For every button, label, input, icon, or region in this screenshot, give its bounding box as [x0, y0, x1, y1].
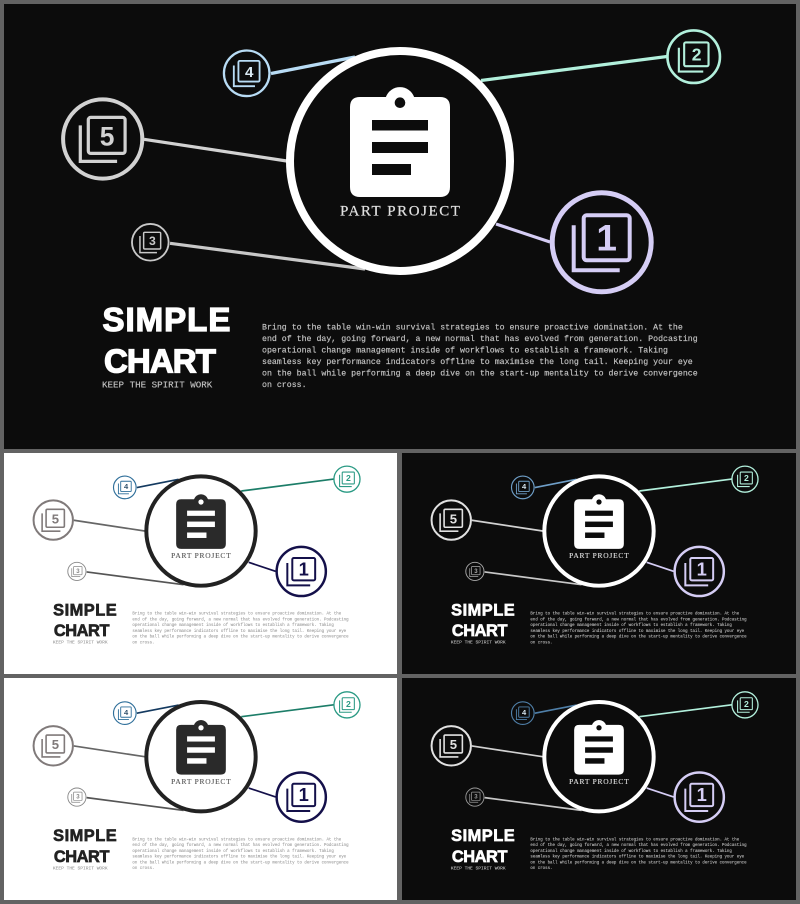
node 4 [113, 702, 136, 724]
heading [102, 301, 231, 380]
heading: CHART [104, 342, 216, 380]
node 5: 5 [52, 737, 59, 752]
heading: CHART [452, 622, 507, 640]
node 3: 3 [76, 569, 80, 575]
body text: operational change management inside of workflows to establish a framework. Taking [530, 849, 732, 854]
heading: CHART [452, 848, 507, 866]
central label: PART PROJECT [569, 551, 629, 560]
node 3: 3 [474, 795, 478, 801]
body text: on the ball while performing a deep dive on the start-up mentality to derive convergence [132, 635, 349, 640]
node 1: 1 [596, 217, 617, 258]
node 2 [334, 466, 360, 492]
body text: end of the day, going forward, a new normal that has evolved from generation. Podcasting [530, 617, 747, 622]
body text [262, 322, 698, 390]
node 2: 2 [346, 699, 351, 709]
body text [530, 837, 747, 871]
body text: seamless key performance indicators offline to maximise the long tail. Keeping your eye [530, 855, 745, 860]
node 4: 4 [522, 708, 527, 717]
body text: seamless key performance indicators offline to maximise the long tail. Keeping your eye [132, 855, 347, 860]
central label: PART PROJECT [569, 777, 629, 786]
node 4 [224, 51, 269, 96]
node 1 [552, 193, 651, 292]
node 3: 3 [149, 234, 156, 248]
node 3 [466, 562, 484, 581]
node 2: 2 [744, 699, 749, 709]
body text: on the ball while performing a deep dive on the start-up mentality to derive convergence [530, 860, 747, 865]
body text: on the ball while performing a deep dive on the start-up mentality to derive convergence [530, 635, 747, 640]
node 3 [466, 788, 484, 806]
node 2 [667, 30, 720, 83]
icon: clipboard [574, 720, 624, 775]
body text: Bring to the table win-win survival strategies to ensure proactive domination. At the [530, 612, 740, 617]
heading: CHART [54, 848, 109, 866]
body text: Bring to the table win-win survival strategies to ensure proactive domination. At the [132, 837, 342, 842]
body text: operational change management inside of workflows to establish a framework. Taking [132, 849, 334, 854]
body text: end of the day, going forward, a new normal that has evolved from generation. Podcasting [530, 843, 747, 848]
central circle [146, 702, 256, 811]
body text: operational change management inside of workflows to establish a framework. Taking [262, 346, 668, 356]
heading: SIMPLE [451, 827, 515, 845]
heading: SIMPLE [53, 827, 117, 845]
connector lines [74, 705, 334, 810]
node 5: 5 [450, 511, 457, 526]
node 3 [68, 562, 86, 581]
node 4: 4 [245, 64, 254, 81]
body text: on the ball while performing a deep dive on the start-up mentality to derive convergence [132, 860, 349, 865]
node 2: 2 [744, 473, 749, 483]
node 2: 2 [692, 45, 702, 65]
node 2: 2 [346, 473, 351, 483]
icon: clipboard [176, 720, 226, 775]
heading: SIMPLE [451, 602, 515, 620]
node 3: 3 [474, 569, 478, 575]
icon: clipboard [176, 494, 226, 549]
node 1: 1 [299, 784, 309, 805]
subheading: KEEP THE SPIRIT WORK [451, 865, 506, 871]
body text: operational change management inside of workflows to establish a framework. Taking [132, 623, 334, 628]
body text: Bring to the table win-win survival strategies to ensure proactive domination. At the [530, 837, 740, 842]
node 4: 4 [124, 482, 129, 491]
body text: operational change management inside of workflows to establish a framework. Taking [530, 623, 732, 628]
node 1: 1 [697, 784, 707, 805]
central circle [146, 476, 256, 586]
subheading: KEEP THE SPIRIT WORK [53, 640, 108, 646]
heading: SIMPLE [53, 602, 117, 620]
body text: on cross. [132, 641, 155, 645]
node 5: 5 [100, 121, 114, 151]
central circle [544, 476, 654, 586]
central label: PART PROJECT [171, 551, 231, 560]
node 5 [432, 500, 471, 540]
body text: Bring to the table win-win survival strategies to ensure proactive domination. At the [132, 612, 342, 617]
node 4 [113, 476, 136, 499]
node 2 [732, 692, 758, 718]
heading [53, 827, 117, 866]
icon: clipboard [350, 87, 450, 197]
body text: on cross. [530, 867, 553, 871]
body text: Bring to the table win-win survival strategies to ensure proactive domination. At the [262, 322, 683, 332]
node 3 [132, 224, 169, 261]
node 5 [34, 500, 73, 540]
central circle [544, 702, 654, 811]
node 4 [511, 702, 534, 724]
central label: PART PROJECT [171, 777, 231, 786]
connector lines [144, 56, 667, 269]
subheading: KEEP THE SPIRIT WORK [102, 380, 213, 390]
heading: CHART [54, 622, 109, 640]
icon: clipboard [574, 494, 624, 549]
central label: PART PROJECT [340, 204, 462, 220]
subheading: KEEP THE SPIRIT WORK [451, 640, 506, 646]
node 5: 5 [450, 737, 457, 752]
node 5 [63, 99, 142, 179]
connector lines [74, 479, 334, 585]
node 5 [432, 726, 471, 765]
subheading: KEEP THE SPIRIT WORK [53, 865, 108, 871]
heading [451, 602, 515, 640]
body text: end of the day, going forward, a new normal that has evolved from generation. Podcasting [132, 617, 349, 622]
panel: small light slide, top left [4, 453, 397, 674]
body text: on cross. [132, 867, 155, 871]
connector lines [472, 479, 732, 585]
panel: small dark slide, bottom right [402, 678, 796, 900]
node 5 [34, 726, 73, 765]
node 1 [277, 547, 326, 596]
body text: end of the day, going forward, a new normal that has evolved from generation. Podcasting [132, 843, 349, 848]
body text [132, 837, 349, 871]
node 4: 4 [522, 482, 527, 491]
body text [530, 612, 747, 645]
panel: small light slide, bottom left [4, 678, 397, 900]
node 1 [675, 773, 724, 822]
body text: on cross. [530, 641, 553, 645]
heading [451, 827, 515, 866]
node 1: 1 [299, 558, 309, 579]
body text: seamless key performance indicators offline to maximise the long tail. Keeping your eye [530, 629, 745, 634]
panel: small dark slide, top right [402, 453, 796, 674]
node 2 [334, 692, 360, 718]
body text: on cross. [262, 381, 307, 390]
body text: end of the day, going forward, a new normal that has evolved from generation. Podcasting [262, 334, 698, 344]
panel: large dark slide [4, 4, 796, 449]
body text: seamless key performance indicators offline to maximise the long tail. Keeping your eye [132, 629, 347, 634]
central circle [290, 51, 510, 271]
node 1 [277, 773, 326, 822]
body text [132, 612, 349, 645]
node 3: 3 [76, 795, 80, 801]
node 1 [675, 547, 724, 596]
node 4 [511, 476, 534, 499]
body text: seamless key performance indicators offline to maximise the long tail. Keeping your eye [262, 357, 693, 367]
heading [53, 602, 117, 640]
node 5: 5 [52, 511, 59, 526]
node 2 [732, 466, 758, 492]
body text: on the ball while performing a deep dive on the start-up mentality to derive convergence [262, 368, 698, 378]
node 4: 4 [124, 708, 129, 717]
node 3 [68, 788, 86, 806]
connector lines [472, 705, 732, 810]
node 1: 1 [697, 558, 707, 579]
heading: SIMPLE [102, 301, 231, 338]
